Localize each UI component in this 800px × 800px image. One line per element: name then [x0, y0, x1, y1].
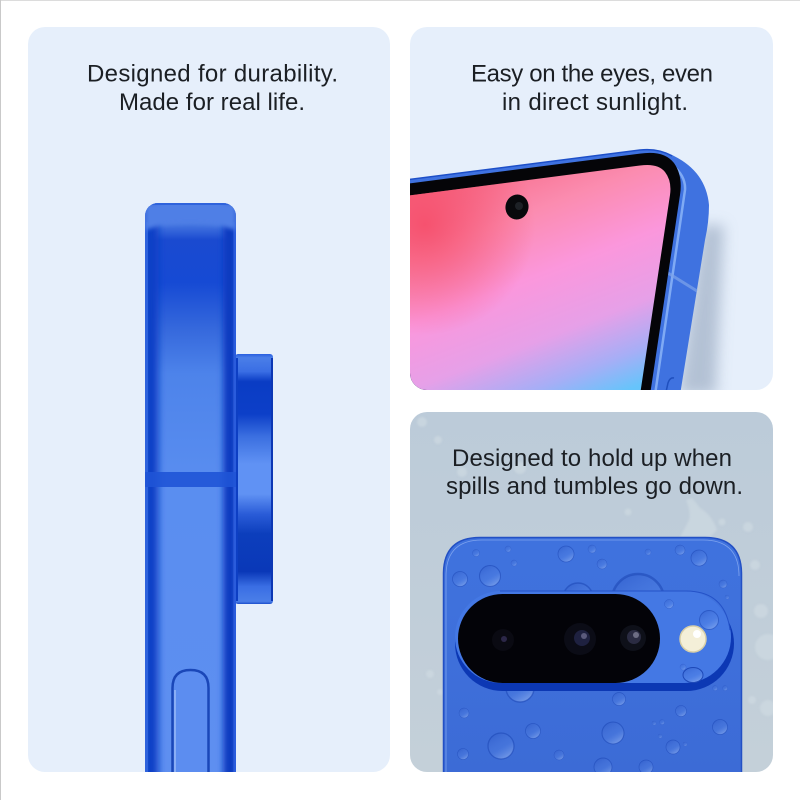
panel: sunlight display	[405, 27, 773, 395]
water splashes	[417, 417, 781, 716]
camera bar side	[235, 354, 273, 604]
phone frame	[405, 150, 709, 395]
heading: durability: Made for real life.	[119, 89, 305, 116]
panel: durability	[28, 27, 390, 783]
droplets on camera bar	[664, 600, 718, 682]
antenna band	[145, 472, 236, 487]
screen	[405, 165, 670, 395]
front camera	[505, 194, 529, 220]
phone shadow	[678, 225, 724, 395]
bezel	[405, 153, 681, 395]
camera window	[458, 594, 660, 683]
side button	[666, 378, 674, 392]
heading: water resistance: Designed to hold up when	[452, 445, 732, 472]
side button	[172, 670, 208, 775]
camera bar	[455, 591, 734, 691]
heading: sunlight	[471, 60, 713, 116]
heading: water resistance: spills and tumbles go down.	[446, 473, 743, 500]
phone side view	[145, 203, 273, 783]
flash	[680, 626, 706, 652]
heading: durability	[87, 60, 338, 116]
heading: durability: Designed for durability.	[87, 60, 338, 88]
lens left	[492, 629, 514, 651]
phone back	[442, 536, 742, 772]
heading: sunlight: in direct sunlight.	[502, 89, 688, 116]
heading: water resistance	[446, 445, 743, 500]
lens center	[564, 623, 596, 655]
lens right	[620, 625, 646, 651]
phone frame	[145, 203, 236, 783]
water droplets	[452, 545, 729, 776]
phone front view	[405, 150, 724, 395]
heading: sunlight: Easy on the eyes, even	[471, 60, 713, 88]
panel: water resistance	[410, 412, 781, 800]
